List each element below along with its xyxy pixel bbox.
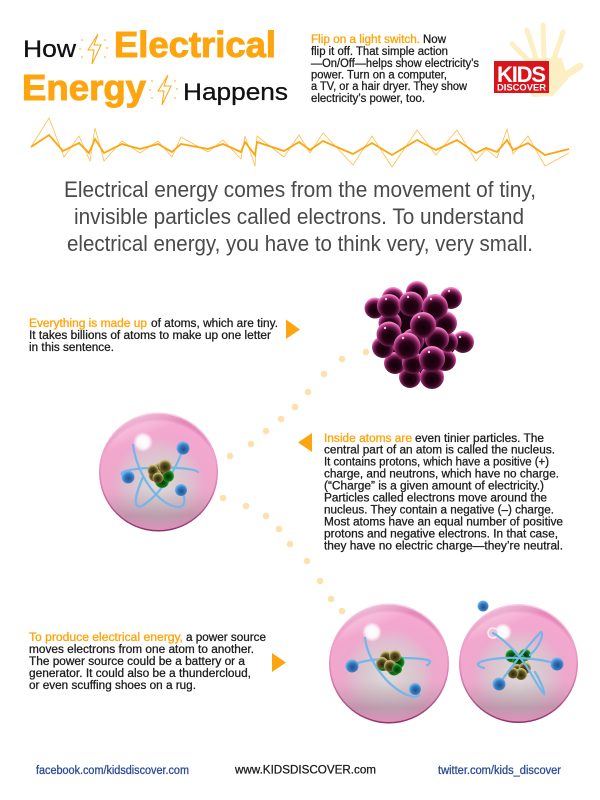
- text block: everything is made up of atoms: [29, 316, 278, 354]
- title word: Happens: Happens: [183, 79, 288, 106]
- text block: everything is made up of atoms: It takes billions of atoms to make up one letter: [29, 328, 271, 342]
- illustration: atom with free electron: [459, 604, 578, 723]
- icon: lightning bolt 1: [79, 34, 108, 64]
- text block: light switch intro: Now: [423, 32, 446, 46]
- icon: lightning bolt 2: [149, 75, 178, 105]
- logo word: KIDS: KIDS: [497, 62, 546, 87]
- text block: to produce electrical energy: [29, 630, 266, 692]
- footer: [36, 762, 561, 777]
- electrons: [492, 658, 564, 690]
- text block: inside atoms: Particles called electrons move around the: [324, 490, 547, 504]
- footer link: facebook: facebook.com/kidsdiscover.com: [36, 763, 189, 777]
- text block: inside atoms: nucleus. They contain a negative (–) charge.: [324, 502, 554, 516]
- text block: light switch intro: [311, 32, 479, 105]
- footer link: twitter: twitter.com/kids_discover: [438, 763, 561, 777]
- illustration: atom losing electron: [329, 604, 449, 724]
- text block: light switch intro: electricity’s power, too.: [311, 91, 425, 105]
- footer link: website: www.KIDSDISCOVER.com: [234, 762, 376, 776]
- title: [22, 24, 288, 108]
- sphere: [329, 604, 449, 724]
- text block: to produce electrical energy: moves electrons from one atom to another.: [29, 642, 254, 656]
- nucleus: [376, 650, 404, 676]
- title word: How: How: [23, 36, 76, 63]
- icon: free electron: [478, 600, 488, 612]
- text block: light switch intro: power. Turn on a computer,: [311, 68, 447, 82]
- text block: light switch intro: a TV, or a hair dryer. They show: [311, 79, 467, 93]
- title word: Energy: Energy: [22, 67, 146, 108]
- intro paragraph: Electrical energy comes from the movement of tiny,: [64, 177, 536, 202]
- text block: inside atoms: central part of an atom is called the nucleus.: [324, 442, 555, 456]
- text block: inside atoms: protons and negative electrons. In that case,: [324, 526, 558, 540]
- illustration: atom with three electrons: [99, 412, 218, 532]
- dotted path connecting illustrations: [220, 349, 369, 614]
- text block: light switch intro: flip it off. That simple action: [311, 44, 448, 58]
- intro paragraph: electrical energy, you have to think very, very small.: [67, 231, 533, 256]
- nucleus: [506, 649, 531, 680]
- title word: Electrical: Electrical: [114, 24, 276, 65]
- text block: inside atoms: It contains protons, which have a positive (+): [324, 454, 549, 468]
- arrow: left to atom: [298, 433, 312, 452]
- intro paragraph: [64, 177, 536, 256]
- chart: electric wave line: [31, 118, 569, 167]
- text block: light switch intro: —On/Off—helps show electricity’s: [311, 56, 479, 70]
- text block: to produce electrical energy: or even scuffing shoes on a rug.: [29, 678, 196, 692]
- text block: everything is made up of atoms: in this sentence.: [29, 340, 114, 354]
- text block: to produce electrical energy: The power source could be a battery or a: [29, 654, 245, 668]
- text block: everything is made up of atoms: of atoms, which are tiny.: [151, 316, 278, 330]
- text block: inside atoms: even tinier particles. The: [415, 431, 544, 445]
- text block: inside atoms: [324, 431, 563, 552]
- logo badge: [494, 61, 549, 93]
- icon: hand: [512, 25, 580, 95]
- logo word: DISCOVER: DISCOVER: [497, 82, 547, 92]
- electrons: [122, 442, 190, 496]
- text block: to produce electrical energy: a power source: [186, 630, 266, 644]
- orbits: [478, 632, 557, 694]
- text block: inside atoms: (“Charge” is a given amount of electricity.): [324, 478, 544, 492]
- text block: light switch intro: Flip on a light switch.: [311, 32, 420, 46]
- nucleus: [148, 460, 174, 488]
- illustration: cluster of atoms: [364, 281, 474, 389]
- text block: inside atoms: charge, and neutrons, which have no charge.: [324, 466, 559, 480]
- sphere: [99, 412, 218, 532]
- arrow: right to molecule: [286, 320, 300, 339]
- text block: to produce electrical energy: To produce electrical energy,: [29, 630, 183, 644]
- text block: inside atoms: Most atoms have an equal number of positive: [324, 514, 563, 528]
- orbits: [122, 445, 198, 507]
- orbits: [352, 638, 430, 697]
- arrow: right to atoms: [272, 653, 286, 672]
- text block: inside atoms: Inside atoms are: [324, 431, 412, 445]
- sphere: [459, 604, 578, 723]
- text block: to produce electrical energy: generator. It could also be a thundercloud,: [29, 666, 251, 680]
- text block: inside atoms: they have no electric charge—they’re neutral.: [324, 538, 563, 552]
- logo: Kids Discover: [494, 25, 580, 95]
- electrons: [346, 660, 421, 695]
- intro paragraph: invisible particles called electrons. To understand: [74, 204, 524, 229]
- text block: everything is made up of atoms: Everything is made up: [29, 316, 147, 330]
